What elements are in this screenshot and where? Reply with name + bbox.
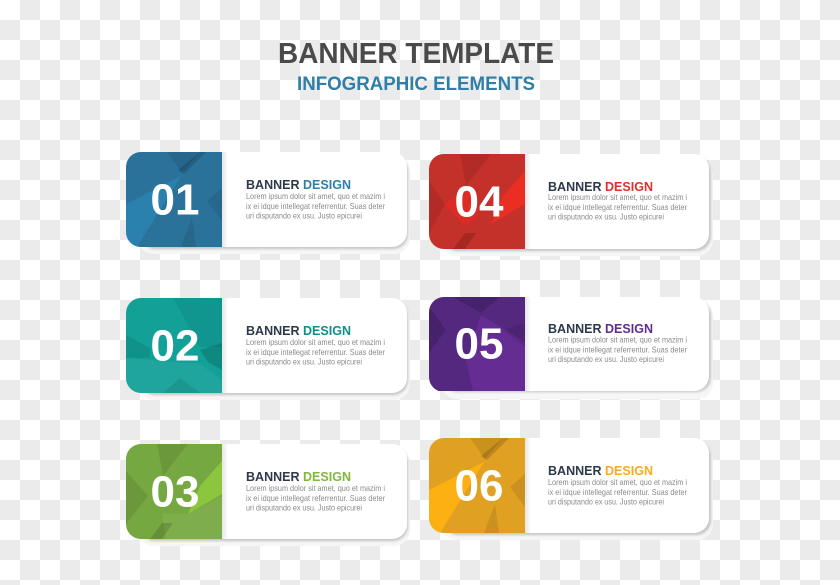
banner 01	[126, 152, 410, 254]
text block 03: BANNER DESIGN	[246, 469, 351, 484]
text block 02: BANNER DESIGN	[246, 323, 351, 338]
text block 01	[246, 177, 385, 220]
number 03: 03	[151, 468, 199, 516]
text block 02: ix ei idque intellegat referrentur. Suas deter	[246, 347, 385, 357]
text block 05: ix ei idque intellegat referrentur. Suas deter	[548, 344, 687, 354]
text block 04: BANNER DESIGN	[548, 179, 653, 194]
text block 03: uri disputando ex usu. Justo epicurei	[246, 502, 362, 512]
banner 03	[126, 444, 410, 546]
text block 02: Lorem ipsum dolor sit amet, quo et mazim i	[246, 337, 385, 347]
text block 05: uri disputando ex usu. Justo epicurei	[548, 354, 664, 364]
text block 01: BANNER DESIGN	[246, 177, 351, 192]
text block 04: Lorem ipsum dolor sit amet, quo et mazim i	[548, 192, 687, 202]
colour panel 05	[429, 297, 525, 391]
subtitle: INFOGRAPHIC ELEMENTS	[297, 73, 535, 95]
number 02: 02	[151, 322, 199, 370]
text block 06: Lorem ipsum dolor sit amet, quo et mazim i	[548, 477, 687, 487]
colour panel 06	[429, 438, 525, 533]
text block 06	[548, 463, 687, 506]
banner 05	[429, 297, 713, 399]
text block 05: Lorem ipsum dolor sit amet, quo et mazim i	[548, 334, 687, 344]
colour panel 01	[126, 152, 222, 247]
colour panel 03	[126, 444, 222, 539]
text block 05	[548, 321, 687, 364]
text block 02	[246, 323, 385, 366]
number 06: 06	[455, 462, 503, 510]
number 05: 05	[455, 320, 503, 368]
text block 01: uri disputando ex usu. Justo epicurei	[246, 210, 362, 220]
text block 04	[548, 179, 687, 222]
text block 03: ix ei idque intellegat referrentur. Suas deter	[246, 493, 385, 503]
text block 06: BANNER DESIGN	[548, 463, 653, 478]
text block 02: uri disputando ex usu. Justo epicurei	[246, 356, 362, 366]
text block 06: uri disputando ex usu. Justo epicurei	[548, 496, 664, 506]
colour panel 04	[429, 154, 525, 249]
banner 04	[429, 154, 713, 256]
number 04: 04	[455, 178, 504, 226]
text block 03	[246, 469, 385, 512]
text block 03: Lorem ipsum dolor sit amet, quo et mazim i	[246, 483, 385, 493]
text block 05: BANNER DESIGN	[548, 321, 653, 336]
colour panel 02	[126, 298, 222, 393]
banner 06	[429, 438, 713, 540]
title: BANNER TEMPLATE	[278, 38, 554, 70]
text block 01: Lorem ipsum dolor sit amet, quo et mazim i	[246, 191, 385, 201]
text block 04: uri disputando ex usu. Justo epicurei	[548, 212, 664, 222]
number 01: 01	[151, 176, 199, 224]
text block 01: ix ei idque intellegat referrentur. Suas deter	[246, 201, 385, 211]
text block 04: ix ei idque intellegat referrentur. Suas deter	[548, 202, 687, 212]
text block 06: ix ei idque intellegat referrentur. Suas deter	[548, 487, 687, 497]
banner 02	[126, 298, 410, 400]
